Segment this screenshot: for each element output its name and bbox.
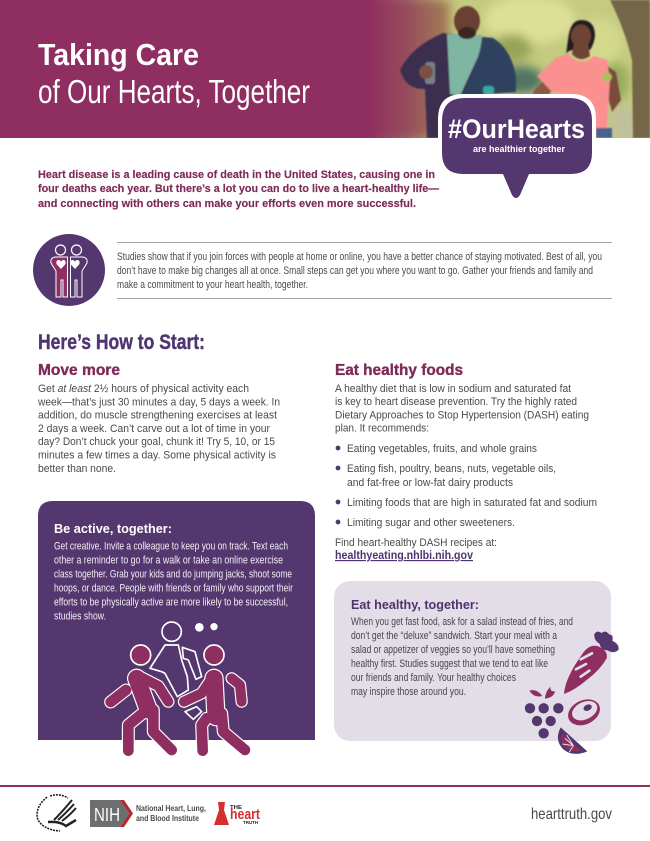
text: move more: week—that’s just 30 minutes a day, 5 days a week. In — [37, 396, 280, 408]
header band — [0, 0, 650, 138]
text: move more: 2 days a week. Can’t carve out a lot of time in your — [38, 423, 270, 435]
text: eat healthy: When you get fast food, ask for a salad instead of fries, and — [351, 616, 573, 628]
woman — [532, 82, 552, 94]
heading: be active: Be active, together: — [54, 521, 172, 536]
studies note — [117, 242, 612, 299]
right runner — [184, 645, 245, 751]
list: recommendations: and fat-free or low-fat dairy products — [347, 477, 513, 489]
list: recommendations — [336, 443, 597, 529]
text: eat healthy: may inspire those around you. — [351, 686, 466, 698]
text: eat healthy: salad or appetizer of veggies so you’ll have something — [351, 644, 555, 656]
text: eat healthy: healthy first. Studies suggest that we tend to eat like — [351, 658, 548, 670]
heading: Eat healthy foods: Eat healthy foods — [335, 362, 463, 379]
logo: NIH — [90, 800, 206, 827]
studies note: make a commitment to your heart health, together. — [117, 279, 308, 291]
left runner — [111, 645, 172, 751]
title — [38, 37, 310, 110]
text: eat healthy foods: is key to heart disease prevention. Try the highly rated — [335, 396, 577, 408]
text: move more: better than none. — [38, 463, 116, 475]
icon: fruit and vegetables — [525, 631, 619, 754]
title: Taking Care — [38, 37, 199, 72]
heading: Here's How to Start: Here’s How to Start: — [38, 330, 205, 354]
text: move more: day? Don’t chuck your goal, chunk it! Try 5, 10, or 15 — [38, 436, 275, 448]
text: be active — [54, 540, 293, 622]
footer divider — [0, 785, 650, 787]
dots — [195, 623, 218, 632]
man — [400, 33, 516, 138]
text: eat healthy foods: A healthy diet that is low in sodium and saturated fat — [335, 383, 572, 395]
logo: HHS seal — [37, 795, 76, 831]
list: recommendations: Limiting sugar and other sweeteners. — [347, 517, 515, 529]
intro paragraph: and connecting with others can make your efforts even more successful. — [38, 198, 416, 210]
text: eat healthy foods: plan. It recommends: — [335, 422, 429, 434]
text: be active: other a reminder to go for a walk or take an online exercise — [54, 554, 283, 566]
text: eat healthy: don’t get the “deluxe” sandwich. Start your meal with a — [351, 630, 557, 642]
logo: NIH: NIH — [94, 805, 120, 825]
speech bubble: #OurHearts: are healthier together — [473, 144, 566, 154]
logo: The Heart Truth — [214, 802, 260, 825]
speech bubble: #OurHearts — [438, 94, 596, 198]
heading: eat healthy: Eat healthy, together: — [351, 597, 479, 612]
heading: Move more: Move more — [38, 362, 120, 379]
intro paragraph — [38, 169, 440, 210]
text: be active: hoops, or dance. People with friends or family who support their — [54, 582, 293, 594]
list: recommendations: Eating vegetables, fruits, and whole grains — [347, 443, 537, 455]
icon: two people with hearts — [33, 234, 105, 306]
icon: three runners — [111, 622, 245, 751]
intro paragraph: Heart disease is a leading cause of death in the United States, causing one in — [38, 169, 435, 181]
text: eat healthy foods — [335, 383, 589, 434]
text: eat healthy — [351, 616, 573, 698]
list: recommendations: Limiting foods that are high in saturated fat and sodium — [347, 497, 597, 509]
list: recommendations: Eating fish, poultry, beans, nuts, vegetable oils, — [347, 463, 556, 475]
fig — [564, 694, 604, 730]
photo: couple walking outdoors — [350, 0, 650, 138]
text: be active: Get creative. Invite a colleague to keep you on track. Text each — [54, 540, 288, 552]
recipes link: Find heart-healthy DASH recipes at: — [335, 537, 497, 549]
text: move more: Get at least 2½ hours of physical activity each — [38, 383, 249, 395]
recipes link — [335, 537, 497, 562]
panel: be active, together — [38, 501, 315, 751]
panel: eat healthy, together — [334, 581, 619, 754]
text: eat healthy: our friends and family. Your healthy choices — [351, 672, 516, 684]
logo: NIH: National Heart, Lung, — [136, 804, 206, 813]
title: of Our Hearts, Together — [38, 73, 310, 110]
text: move more: addition, do muscle strengthening exercises at least — [38, 410, 278, 422]
recipes link: healthyeating.nhlbi.nih.gov — [335, 550, 474, 562]
text: move more: minutes a few times a day. Some physical activity is — [38, 450, 276, 462]
logo: The Heart Truth: heart — [230, 806, 260, 823]
text: be active: efforts to be physically active are more likely to be successful, — [54, 596, 288, 608]
grapes — [525, 687, 563, 738]
middle runner — [150, 622, 202, 719]
logo: NIH: and Blood Institute — [136, 814, 200, 823]
speech bubble: #OurHearts: #OurHearts — [448, 114, 585, 144]
text: be active: class together. Grab your kids and do jumping jacks, shoot some — [54, 568, 292, 580]
text: move more — [37, 383, 280, 475]
text: eat healthy foods: Dietary Approaches to Stop Hypertension (DASH) eating — [335, 410, 589, 422]
citrus slice — [558, 727, 587, 754]
carrot — [564, 631, 619, 694]
text: be active: studies show. — [54, 610, 106, 622]
intro paragraph: four deaths each year. But there’s a lot you can do to live a heart-healthy life— — [38, 183, 440, 195]
website: hearttruth.gov — [531, 806, 612, 823]
logo: The Heart Truth: THE — [230, 805, 243, 811]
logo: The Heart Truth: TRUTH — [243, 820, 258, 825]
